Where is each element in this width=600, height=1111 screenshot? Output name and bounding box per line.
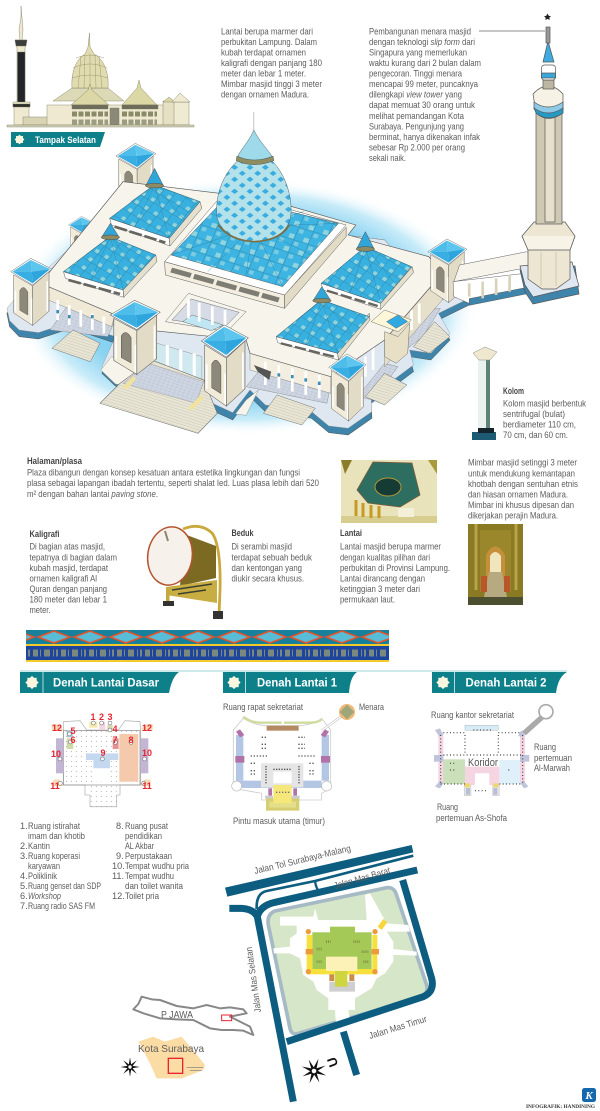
room numbers: 6 [70, 735, 76, 745]
text: minaret note: dengan teknologi slip form dari [369, 37, 475, 47]
heading: Denah Lantai 1: Denah Lantai 1 [257, 678, 338, 690]
room numbers: 5 [70, 726, 76, 736]
minaret collar [533, 86, 563, 118]
text: Mimbar: dikerjakan perajin Madura. [468, 511, 558, 521]
text: Beduk: dan kentongan yang [232, 563, 302, 573]
legend: ground floor rooms: 4. [20, 871, 28, 881]
second floor labels: Al-Marwah [534, 763, 570, 773]
text: Lantai: perbukitan di Provinsi Lampung. [340, 563, 450, 573]
text: Beduk: Beduk [232, 527, 254, 538]
text: floor and dome note: perbukitan Lampung. Dalam [221, 37, 317, 47]
text: Kaligrafi: meter. [30, 605, 50, 615]
room numbers: 1 [90, 712, 96, 722]
legend: ground floor rooms: 6. [20, 891, 28, 901]
text: minaret note: Singapura yang memerlukan [369, 48, 467, 58]
heading: Denah Lantai Dasar [20, 672, 179, 693]
legend: ground floor rooms: Ruang genset dan SDP [28, 881, 101, 891]
legend: ground floor rooms: 12. [112, 891, 125, 901]
text: Lantai: ketinggian 3 meter dari [340, 584, 420, 594]
heading: Denah Lantai 1 [223, 672, 357, 693]
elevation: central dome [53, 33, 124, 101]
minaret top [543, 80, 554, 89]
small cream tower [371, 310, 412, 363]
second floor labels: Ruang [437, 802, 458, 812]
text: minaret note: sebesar Rp 2.000 per orang [369, 142, 465, 152]
structural dots [439, 730, 523, 791]
text: minaret note: dilengkapi view tower yang [369, 90, 462, 100]
first floor labels [223, 702, 385, 826]
elevation: side domes and facade [7, 80, 194, 127]
road label: toll: Jalan Tol Surabaya-Malang [253, 843, 352, 876]
text: minaret note: waktu kurang dari 2 bulan dalam [368, 58, 481, 68]
legend: ground floor rooms: Toilet pria [125, 891, 160, 901]
text: floor and dome note [221, 27, 322, 100]
first floor labels: Menara [359, 702, 385, 712]
text: Kaligrafi: ornamen kaligrafi Al [30, 574, 97, 584]
plaza and walkways [273, 893, 417, 1025]
north marker: U [324, 1055, 341, 1069]
room numbers: 12 [52, 723, 62, 733]
legend: ground floor rooms: 11. [112, 871, 124, 881]
text: minaret note: melihat pemandangan Kota [369, 111, 465, 121]
text: Halaman/plasa: Plaza dibangun dengan konsep kesatuan antara estetika lingkungan dan fungsi [27, 468, 300, 478]
legend: ground floor rooms: Tempat wudhu pria [125, 861, 190, 871]
legend: ground floor rooms: Kantin [28, 841, 50, 851]
roof: east pavilion [321, 232, 413, 309]
locator: Java island [133, 997, 253, 1035]
rear towers [68, 143, 156, 260]
roof: north-west pavilion [110, 168, 202, 246]
road label: timur: Jalan Mas Timur [368, 1014, 428, 1041]
text: Halaman/plasa [27, 455, 319, 499]
text: Beduk: terdapat sebuah beduk [232, 552, 312, 562]
text: Mimbar: Mimbar ini khusus dipesan dan [468, 500, 574, 510]
plan outline [63, 721, 141, 807]
heading: Denah Lantai 2: Denah Lantai 2 [466, 678, 546, 690]
text: floor and dome note: dengan ornamen Madura. [221, 90, 309, 100]
main roof [165, 192, 346, 308]
logo K [582, 1088, 596, 1102]
text: Kaligrafi [30, 528, 117, 615]
illustration: bedug drum [143, 523, 223, 619]
legend: ground floor rooms [20, 821, 190, 911]
legend: ground floor rooms: dan toilet wanita [125, 881, 184, 891]
room numbers: 3 [107, 712, 113, 722]
plaza slab [40, 182, 442, 377]
second floor labels: pertemuan [534, 753, 572, 763]
legend: ground floor rooms: 9. [116, 851, 124, 861]
roof: west pavilion [63, 223, 157, 297]
side corridors [232, 729, 332, 791]
credit: INFOGRAFIK: HANDINING [526, 1104, 596, 1110]
icon: site compass [297, 1054, 331, 1088]
text: minaret note: Pembangunan menara masjid [369, 27, 471, 37]
room numbers: 10 [142, 748, 152, 758]
first floor labels: Ruang rapat sekretariat [223, 702, 303, 712]
road label: selatan: Jalan Mas Selatan [244, 946, 263, 1013]
building footprint [306, 919, 387, 992]
minaret pedestal [522, 222, 575, 289]
photo: interior dome [341, 460, 437, 523]
text: floor and dome note: Lantai berupa marmer dari [221, 27, 313, 37]
legend: ground floor rooms: 3. [20, 851, 28, 861]
heading: Denah Lantai Dasar: Denah Lantai Dasar [53, 678, 160, 690]
text: minaret note [368, 27, 481, 163]
first floor plan [223, 702, 385, 826]
icon: small compass [120, 1057, 140, 1077]
text: Kaligrafi: Di bagian atas masjid, [30, 542, 105, 552]
text: Lantai: Lantai masjid berupa marmer [340, 542, 441, 552]
icon: column [472, 347, 497, 440]
text: Halaman/plasa: Halaman/plasa [27, 455, 83, 466]
locator: Kota Surabaya: Kota Surabaya [138, 1043, 204, 1055]
text: Beduk [232, 527, 312, 584]
text: Beduk: Di serambi masjid [232, 542, 292, 552]
minaret shaft [536, 110, 562, 224]
text: floor and dome note: kaligrafi dengan panjang 180 [221, 58, 322, 68]
second floor labels: Ruang kantor sekretariat [431, 710, 514, 720]
first floor labels: Pintu masuk utama (timur) [233, 816, 325, 826]
room numbers: 4 [112, 724, 118, 734]
legend: ground floor rooms: 2. [20, 841, 28, 851]
arrow: minaret leader line [479, 30, 545, 32]
text: minaret note: pengecoran. Tinggi menara [369, 69, 463, 79]
legend: ground floor rooms: 5. [20, 881, 28, 891]
heading: Denah Lantai 2 [432, 672, 567, 693]
minaret plan [524, 705, 553, 733]
text: floor and dome note: kubah terdapat ornamen [221, 48, 306, 58]
blue base [7, 207, 469, 435]
second floor labels: pertemuan As-Shofa [436, 813, 508, 823]
legend: ground floor rooms: Workshop [28, 891, 61, 901]
text: Kolom: sentrifugal (bulat) [503, 409, 565, 419]
room numbers: 10 [51, 749, 61, 759]
text: floor and dome note: meter dan lebar 1 meter. [221, 69, 306, 79]
plan body [233, 718, 331, 800]
legend: ground floor rooms: Poliklinik [28, 871, 57, 881]
roads [225, 845, 432, 1102]
label: Tampak Selatan: Tampak Selatan [35, 135, 96, 145]
text: Kolom: Kolom masjid berbentuk [503, 398, 586, 408]
bridge to minaret [453, 252, 540, 305]
room numbers: 12 [142, 723, 152, 733]
text: Mimbar: khotbah dengan sentuhan etnis [468, 479, 578, 489]
roof: south-east pavilion [276, 287, 370, 360]
text: Beduk: diukir secara khusus. [232, 574, 304, 584]
text: Kolom [503, 385, 586, 440]
side stairs [52, 322, 450, 425]
base top tier [7, 207, 469, 428]
text: Kaligrafi: Kaligrafi [30, 528, 60, 539]
text: minaret note: sekali naik. [369, 153, 406, 163]
text: Kolom: 70 cm, dan 60 cm. [503, 430, 568, 440]
text: minaret note: berminat, hanya dikenakan infak [369, 132, 480, 142]
ground floor plan [50, 712, 153, 807]
minaret [520, 14, 579, 304]
legend: ground floor rooms: Ruang koperasi [28, 851, 80, 861]
legend: ground floor rooms: 7. [20, 901, 28, 911]
room numbers: 7 [112, 735, 118, 745]
legend: ground floor rooms: 8. [116, 821, 124, 831]
text: minaret note: mencapai 99 meter, puncaknya [369, 79, 479, 89]
text: Lantai: dengan kualitas pilihan dari [340, 552, 430, 562]
text: Kaligrafi: Quran dengan panjang [30, 584, 107, 594]
room markers [58, 721, 147, 785]
legend: ground floor rooms: Ruang pusat [125, 821, 168, 831]
legend: ground floor rooms: Perpustakaan [125, 851, 172, 861]
text: Kaligrafi: 180 meter dan lebar 1 [30, 595, 107, 605]
text: floor and dome note: Mimbar masjid tinggi 3 meter [221, 79, 322, 89]
site ground [268, 888, 427, 1034]
text: Lantai: Lantai dirancang dengan [340, 574, 425, 584]
minaret platform [520, 266, 579, 304]
room numbers: 2 [99, 712, 104, 722]
text: minaret note: dapat memuat 30 orang untuk [369, 100, 475, 110]
text: Mimbar [468, 458, 578, 521]
legend: ground floor rooms: 10. [112, 861, 125, 871]
courtyard [165, 293, 246, 332]
decorative rule [20, 670, 567, 672]
text: Mimbar: Mimbar masjid setinggi 3 meter [468, 458, 577, 468]
text: Kaligrafi: tepatnya di bagian dalam [30, 552, 117, 562]
second floor labels [431, 710, 572, 823]
text: Kolom: berdiameter 110 cm, [503, 420, 576, 430]
legend: ground floor rooms: AL Akbar [125, 841, 154, 851]
legend: ground floor rooms: Ruang istirahat [28, 821, 80, 831]
rooms [434, 725, 529, 794]
site map [225, 843, 432, 1102]
legend: ground floor rooms: karyawan [28, 861, 60, 871]
text: Lantai: permukaan laut. [340, 595, 395, 605]
photo: mimbar [468, 524, 523, 605]
colonnades [40, 273, 442, 398]
colored rooms [52, 722, 153, 786]
locator: Java island: P JAWA [161, 1010, 193, 1021]
text: minaret note: Surabaya. Pengunjung yang [369, 121, 464, 131]
room numbers [50, 712, 152, 791]
text: Halaman/plasa: m² dengan bahan lantai paving stone. [27, 489, 158, 499]
text: Kaligrafi: kubah masjid, terdapat [30, 563, 108, 573]
text: Kolom: Kolom [503, 385, 524, 396]
room numbers: 11 [50, 781, 60, 791]
text: Lantai [340, 527, 450, 605]
main entrance [265, 785, 300, 811]
text: Mimbar: untuk mendukung kemantapan [468, 468, 575, 478]
minaret plan [322, 704, 355, 731]
mosque illustration [7, 112, 540, 435]
elevation: minaret [13, 6, 51, 125]
south elevation drawing [7, 6, 194, 127]
calligraphy banner [26, 630, 389, 662]
second floor labels: Ruang [534, 742, 556, 752]
room numbers: 11 [142, 781, 152, 791]
label: Tampak Selatan [11, 132, 105, 147]
room numbers: 9 [100, 748, 106, 758]
second floor plan [431, 705, 572, 823]
legend: ground floor rooms: Tempat wudhu [125, 871, 174, 881]
legend: ground floor rooms: Ruang radio SAS FM [28, 901, 95, 911]
blue glow [15, 178, 477, 435]
logo K: K [584, 1090, 593, 1102]
legend: ground floor rooms: pendidikan [125, 831, 162, 841]
locator: Kota Surabaya [138, 1037, 205, 1078]
text: Mimbar: dan hiasan ornamen Madura. [468, 489, 568, 499]
main entrance gate [100, 340, 258, 433]
legend: ground floor rooms: imam dan khotib [28, 831, 85, 841]
room numbers: 8 [128, 735, 134, 745]
column dots and lobby [251, 737, 315, 787]
second floor labels: Koridor [468, 757, 498, 769]
text: Lantai: Lantai [340, 527, 362, 538]
terraces [50, 303, 440, 403]
text: Halaman/plasa: plasa sebagai lapangan ibadah tertentu, seperti shalat Ied. Luas plasa lebih dari 520 [27, 478, 319, 488]
stair towers [464, 783, 499, 796]
corner towers [11, 239, 467, 421]
main dome [217, 112, 291, 242]
road label: barat: Jalan Mas Barat [333, 865, 392, 891]
legend: ground floor rooms: 1. [20, 821, 28, 831]
